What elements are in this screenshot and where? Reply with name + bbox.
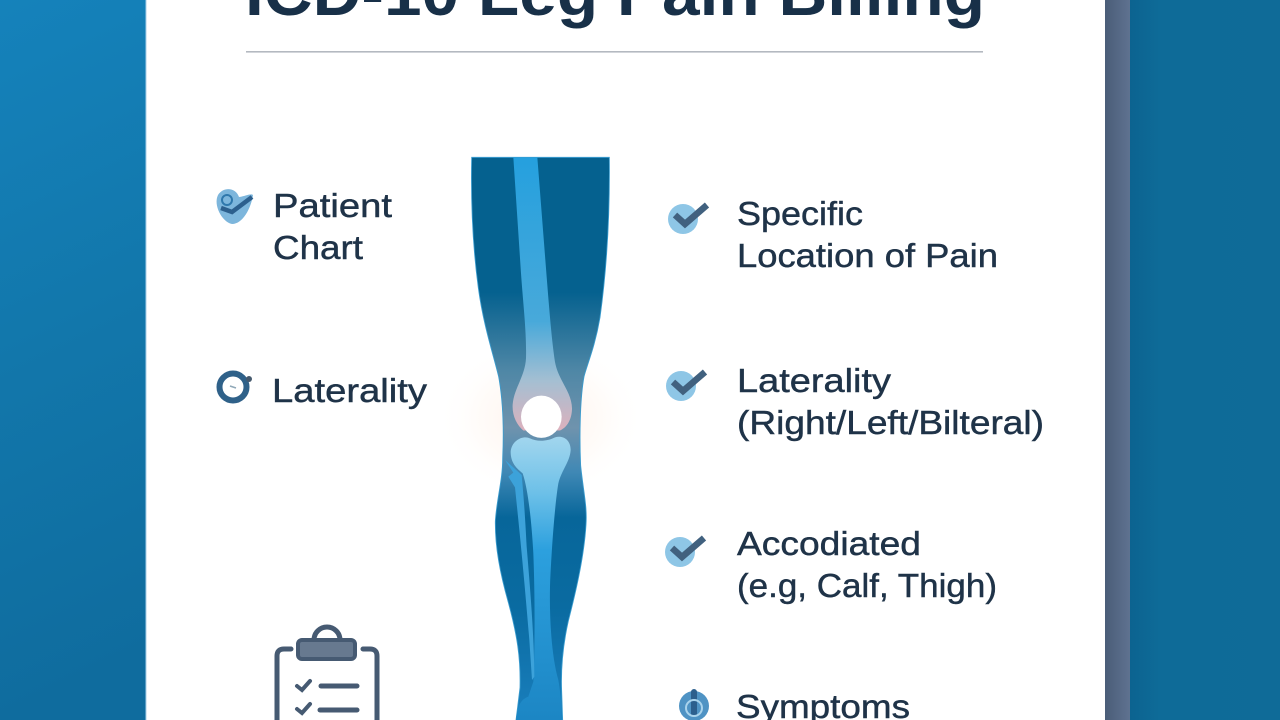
label: Laterality — [272, 372, 428, 409]
background: right blue area — [1130, 0, 1280, 720]
illustration: knee glow — [436, 338, 646, 498]
item: Laterality left — [220, 372, 428, 409]
item: Symptoms — [679, 688, 910, 720]
item: Accodiated: (e.g, Calf, Thigh) — [737, 567, 997, 604]
panel: white card — [146, 0, 1105, 720]
item: Specific Location of Pain — [668, 195, 998, 274]
item: Laterality right — [666, 362, 1044, 441]
label: Specific — [737, 195, 863, 232]
label: Patient — [273, 187, 392, 224]
label: Accodiated — [737, 525, 921, 562]
illustration: leg with bones — [471, 157, 609, 720]
panel shadow band — [1105, 0, 1130, 720]
item: Laterality right: (Right/Left/Bilteral) — [737, 404, 1044, 441]
icon: check — [666, 371, 705, 401]
item: Patient Chart: Chart — [273, 229, 363, 266]
icon: check — [668, 204, 707, 234]
label: Laterality — [737, 362, 892, 399]
icon: check — [665, 537, 704, 567]
tibia and fibula — [505, 437, 571, 720]
item: Accodiated — [665, 525, 997, 604]
icon: ring — [220, 374, 252, 400]
icon: symptoms mark — [679, 691, 709, 720]
leg outline and femur — [471, 157, 609, 720]
icon: clipboard checklist — [277, 627, 377, 720]
background: left blue area — [0, 0, 146, 720]
item: Patient Chart — [217, 187, 392, 266]
icon: patient chart mark — [217, 189, 253, 224]
item: Specific Location of Pain: Location of Pain — [737, 237, 998, 274]
